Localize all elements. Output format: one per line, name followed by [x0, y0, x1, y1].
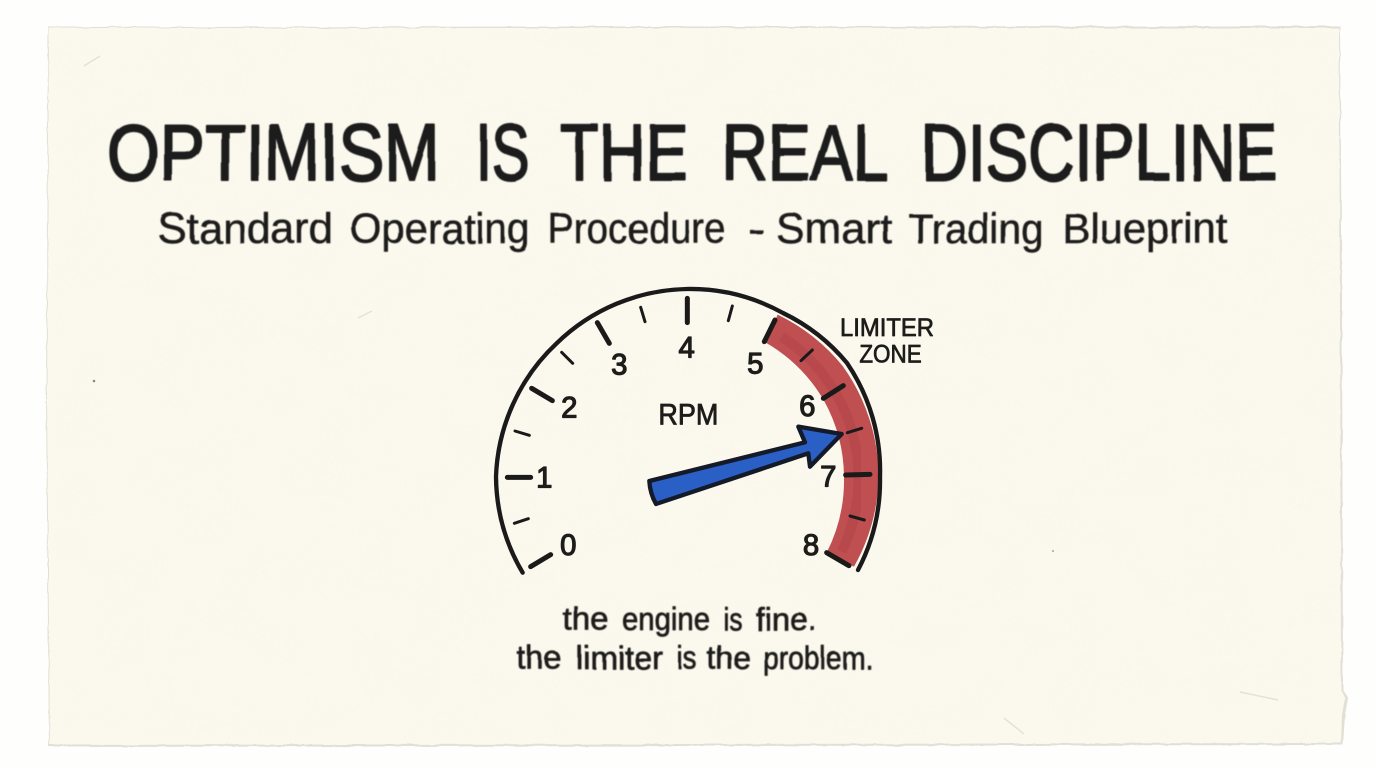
subtitle: Standard: [158, 205, 333, 253]
dial numbers: 6: [799, 390, 815, 423]
caption: [517, 601, 873, 676]
subtitle: Blueprint: [1062, 205, 1228, 253]
caption: the: [563, 601, 609, 637]
limiter zone label: [840, 314, 934, 368]
caption: fine.: [755, 601, 817, 637]
dial numbers: 1: [536, 461, 552, 494]
dial numbers: 7: [820, 461, 836, 494]
dial numbers: 0: [560, 529, 576, 562]
title: THE: [560, 108, 688, 197]
dial numbers: 2: [561, 391, 577, 424]
caption: the: [707, 640, 751, 676]
tick marks: [507, 298, 870, 567]
RPM label: RPM: [658, 398, 718, 431]
title: DISCIPLINE: [921, 108, 1278, 197]
gauge outer arc: [496, 289, 880, 573]
blue needle arrow: [649, 427, 842, 504]
limiter zone label: ZONE: [859, 340, 922, 368]
caption: problem.: [763, 640, 873, 676]
dial numbers: 8: [803, 529, 819, 562]
tachometer gauge: [496, 289, 934, 573]
subtitle: -: [748, 205, 765, 253]
subtitle: [158, 205, 1228, 253]
dial numbers: 4: [679, 332, 695, 365]
caption: is: [723, 601, 742, 637]
caption: the: [517, 640, 562, 676]
limiter zone red band: [765, 315, 879, 567]
dial numbers: [536, 332, 836, 562]
dial numbers: 5: [747, 347, 763, 380]
subtitle: Procedure: [548, 205, 726, 253]
subtitle: Smart: [776, 205, 892, 253]
title: REAL: [722, 108, 888, 197]
subtitle: Trading: [908, 205, 1043, 253]
title: IS: [476, 108, 530, 197]
limiter zone label: LIMITER: [840, 314, 934, 342]
title: OPTIMISM: [107, 108, 440, 197]
dial numbers: 3: [611, 348, 627, 381]
caption: is: [677, 640, 697, 676]
caption: engine: [622, 601, 710, 637]
subtitle: Operating: [350, 205, 530, 253]
title: [107, 108, 1278, 197]
caption: limiter: [576, 640, 663, 676]
